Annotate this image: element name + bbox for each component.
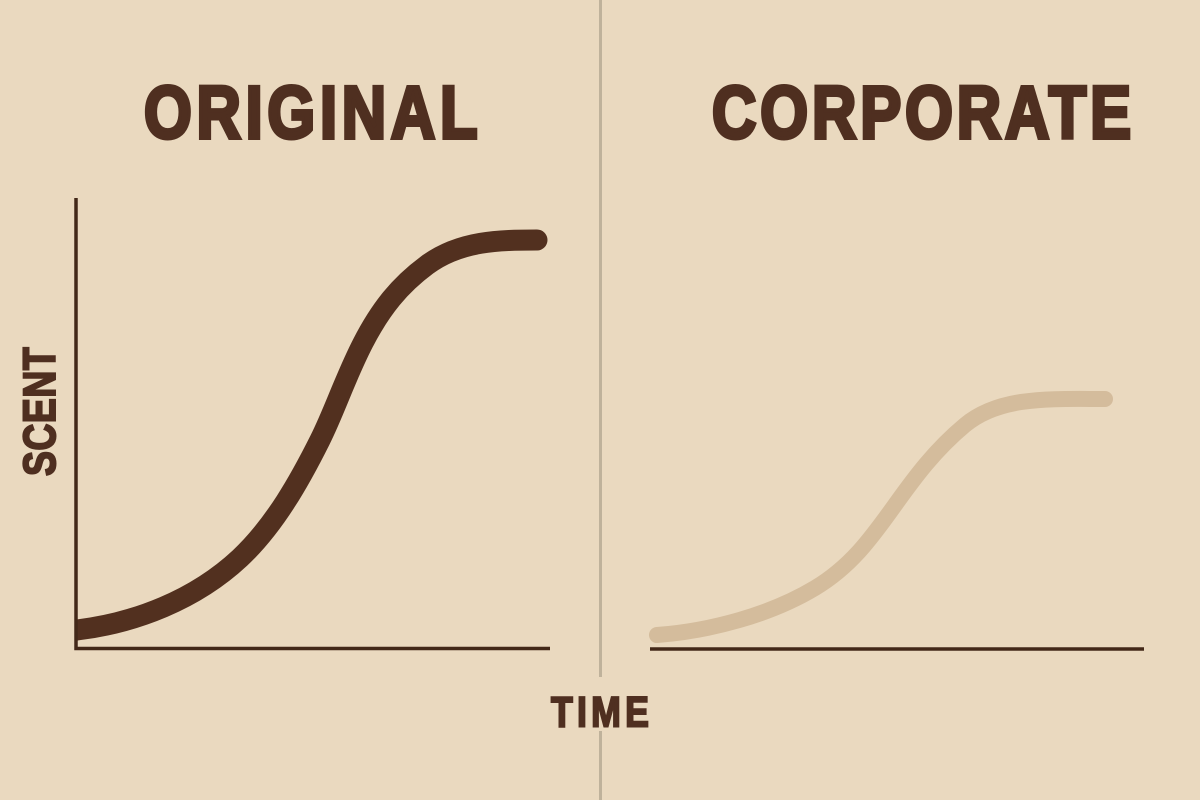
title: corporate: CORPORATE (712, 72, 1131, 154)
curve: corporate (657, 399, 1105, 635)
title: original: ORIGINAL (144, 72, 477, 154)
center divider (599, 0, 602, 800)
axes: original (76, 198, 550, 648)
axis: corporate (650, 647, 1144, 651)
chart: original scent curve (65, 198, 550, 648)
curve: original (65, 240, 537, 631)
y axis label: SCENT (15, 347, 65, 476)
x axis label: TIME (551, 688, 649, 736)
chart: corporate scent curve (650, 399, 1144, 649)
